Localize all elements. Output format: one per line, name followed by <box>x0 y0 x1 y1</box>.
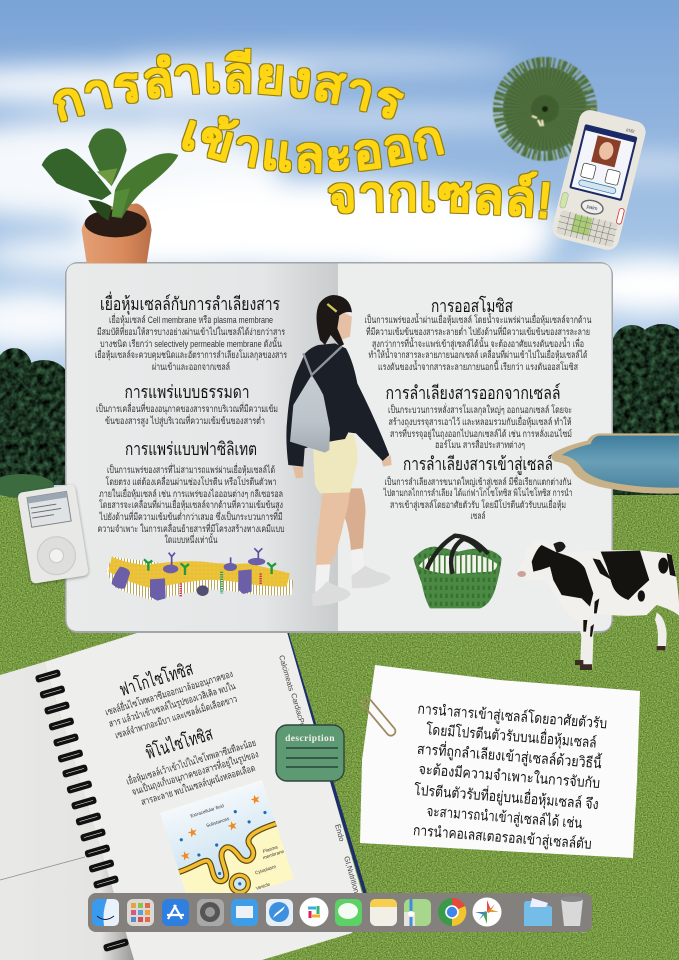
caller photo <box>591 135 621 167</box>
section: facilitated diffusion <box>98 439 284 546</box>
title: จากเซลล์! <box>327 170 550 220</box>
icon: settings <box>197 899 224 926</box>
body text: สร้างถุงบรรจุสารเอาไว้ และหลอมรวมกับเยื่อหุ้มเซลล์ ทำให้ <box>388 415 572 428</box>
body text: เป็นการลำเลียงสารขนาดใหญ่เข้าสู่เซลล์ มีชื่อเรียกแตกต่างกัน <box>384 475 572 488</box>
text: phagocytosis description: สาร แล้วนำเข้าเซลล์ในรูปของเวสิเคิล พบใน <box>107 680 237 730</box>
icon: launchpad <box>127 899 154 926</box>
title <box>52 48 550 220</box>
heading: การแพร่แบบฟาซิลิเทต <box>125 439 257 459</box>
description tag: description <box>285 734 335 744</box>
body text: เป็นการแพร่ของน้ำผ่านเยื่อหุ้มเซลล์ โดยน้ำจะแพร่ผ่านเยื่อหุ้มเซลล์จากด้าน <box>364 313 592 326</box>
brand label: palm <box>586 204 598 212</box>
icon: folder <box>524 898 552 926</box>
icon: messages <box>335 899 362 926</box>
icon: shopping basket <box>413 536 502 608</box>
book: left page <box>66 264 338 631</box>
front leg <box>316 488 350 567</box>
body text: บางชนิด เรียกว่า selectively permeable membrane ดังนั้น <box>100 337 282 350</box>
body text: ภายในเยื่อหุ้มเซลล์ เช่น การแพร่ของไอออนต่างๆ กลีเซอรอล <box>99 487 283 500</box>
carrier label: at&t <box>625 127 636 135</box>
icon: round palm plant <box>496 60 594 158</box>
book: right page <box>338 264 612 631</box>
heading: เยื่อหุ้มเซลล์กับการลำเลียงสาร <box>100 291 280 315</box>
note text: โปรตีนตัวรับที่อยู่บนเยื่อหุ้มเซลล์ จึง <box>413 780 599 813</box>
legs <box>577 610 667 668</box>
main open book panel <box>65 262 613 633</box>
paper note <box>360 665 640 858</box>
title line 2 <box>178 146 452 172</box>
body text: ข้นของสารสูง ไปสู่บริเวณที่ความเข้มข้นของสารต่ำ <box>105 414 265 427</box>
backpack <box>290 375 330 453</box>
note text: จะต้องมีความจำเพาะในการจับกับ <box>418 760 601 792</box>
heading: การลำเลียงสารออกจากเซลล์ <box>386 383 560 403</box>
body text: เป็นการแพร่ของสารที่ไม่สามารถแพร่ผ่านเยื่อหุ้มเซลล์ได้ <box>107 463 275 476</box>
skirt <box>313 433 357 493</box>
photo: walking girl with backpack <box>286 295 392 606</box>
diagram: endocytosis <box>160 780 294 912</box>
text: phagocytosis description: เซลล์ยื่นไซโทพลาซึมออกมาล้อมอนุภาคของ <box>103 667 234 718</box>
shoes <box>312 566 391 606</box>
body text: ที่มีความเข้มข้นของสารละลายต่ำ ไปยังด้านที่มีความเข้มข้นของสารละลาย <box>366 325 590 338</box>
section: simple diffusion <box>96 382 278 427</box>
icon: slack <box>300 898 328 926</box>
diagram: endocytosis: Vesicle <box>255 882 271 891</box>
background: distant trees left <box>0 348 72 485</box>
body text: เซลล์ <box>470 510 486 522</box>
notebook: side tabs: GI,Nutrition <box>342 855 361 894</box>
icon: app store <box>162 899 189 926</box>
icon: plant in terracotta pot <box>42 128 178 263</box>
body text: เยื่อหุ้มเซลล์จะควบคุมชนิดและอัตราการลำเลียงโมเลกุลของสาร <box>95 348 287 361</box>
icon: cow <box>517 540 679 670</box>
title: การลำเลียงสาร <box>52 48 405 122</box>
diagram: endocytosis: Extracellular fluid <box>190 803 225 819</box>
icon: finder <box>92 899 119 926</box>
note text: โดยมีโปรตีนตัวรับบนเยื่อหุ้มเซลล์ <box>425 719 597 752</box>
diagram: endocytosis: ★ <box>249 794 262 807</box>
body text: มีสมบัติที่ยอมให้สารบางอย่างผ่านเข้าไปในเซลล์ได้ง่ายกว่าสาร <box>97 325 285 338</box>
body text: เป็นกระบวนการหลั่งสารโมเลกุลใหญ่ๆ ออกนอกเซลล์ โดยจะ <box>388 403 572 416</box>
diagram: cell membrane <box>107 548 293 601</box>
icon: smartphone <box>550 108 648 252</box>
notebook: side tabs <box>277 654 361 894</box>
heading: pinocytosis: พิโนไซโทซิส <box>143 723 215 763</box>
note text: การนำคอเลสเตอรอลเข้าสู่เซลล์ตับ <box>412 822 592 853</box>
diagram: endocytosis: Plasma <box>262 844 279 854</box>
body text: สารเข้าสู่เซลล์โดยอาศัยตัวรับ โดยมีโปรตีนตัวรับบนเยื่อหุ้ม <box>390 498 566 511</box>
notebook: blue edge <box>277 600 365 893</box>
background: grass field <box>0 474 679 960</box>
icon: mp3 player <box>17 484 89 584</box>
text: phagocytosis description <box>103 667 239 741</box>
section: exocytosis <box>386 383 572 451</box>
body text: ทำให้น้ำจากสารละลายภายนอกเซลล์ เคลื่อนที่ผ่านเข้าไปในเยื่อหุ้มเซลล์ได้ <box>368 348 588 361</box>
diagram: endocytosis: ★ <box>226 820 239 833</box>
notebook: left page <box>0 662 134 960</box>
heading: phagocytosis: ฟาโกไซโทซิส <box>117 658 196 700</box>
diagram: endocytosis: membrane <box>262 849 285 860</box>
keypad <box>556 210 618 247</box>
note text <box>412 700 608 853</box>
body text: ฮอร์โมน สารสื่อประสาทต่างๆ <box>435 438 525 451</box>
background: distant trees right <box>608 324 679 510</box>
leaves <box>88 200 112 221</box>
body text: ความจำเพาะ ในการเคลื่อนย้ายสารที่มีโครงสร้างทางเคมีแบบ <box>98 522 284 535</box>
heading: การลำเลียงสารเข้าสู่เซลล์ <box>403 454 553 475</box>
socks <box>315 548 365 592</box>
heading: การออสโมซิส <box>431 295 513 316</box>
body text <box>388 403 572 451</box>
text: pinocytosis description: จนเป็นถุงเก็บอนุภาคของสารที่อยู่ในรูปของ <box>130 747 260 798</box>
body text: สารที่บรรจุอยู่ในถุงออกไปนอกเซลล์ได้ เช่น การหลั่งเอนไซม์ <box>390 427 572 440</box>
nav buttons <box>559 192 569 209</box>
body text: โดยตรง แต่ต้องเคลื่อนผ่านช่องโปรตีน หรือโปรตีนตัวพา <box>106 475 276 488</box>
diagram: endocytosis: ★ <box>186 827 199 840</box>
section: osmosis <box>364 295 592 373</box>
diagram: endocytosis: Cytoplasm <box>254 864 277 875</box>
diagram: endocytosis: ★ <box>179 850 192 863</box>
icon: pool <box>551 433 679 494</box>
body text <box>95 313 287 373</box>
sweater <box>286 343 389 467</box>
notebook: side tabs: CardiacPulm <box>289 692 310 736</box>
description tag <box>276 725 344 781</box>
body text: แรงดันของน้ำจากสารละลายภายนอกนี้ เรียกว่า แรงดันออสโมซิส <box>378 360 578 373</box>
body text <box>96 402 278 427</box>
pot <box>82 203 152 263</box>
text: pinocytosis description <box>125 736 260 808</box>
icon: safari <box>266 899 293 926</box>
body text: โดยสารจะเคลื่อนที่ผ่านเยื่อหุ้มเซลล์จากด้านที่ความเข้มข้นสูง <box>99 498 283 511</box>
dock bar <box>88 893 592 932</box>
icon: trash <box>561 896 583 926</box>
section: endocytosis <box>383 454 572 522</box>
body text: ไปยังด้านที่มีความเข้มข้นต่ำกว่าเสมอ ซึ่งเป็นกระบวนการที่มี <box>99 510 282 523</box>
note text: การนำสารเข้าสู่เซลล์โดยอาศัยตัวรับ <box>417 700 608 732</box>
hair and head <box>336 312 352 341</box>
body text <box>98 463 284 546</box>
text: phagocytosis description: เซลล์จำพวกอะมีบา และเซลล์เม็ดเลือดขาว <box>113 692 239 741</box>
icon: photos <box>472 898 502 926</box>
notebook: side tabs: Calcimeats <box>277 654 296 692</box>
icon: paper clip <box>361 696 397 738</box>
title line 3 <box>328 211 548 218</box>
body text: เป็นการเคลื่อนที่ของอนุภาคของสารจากบริเวณที่มีความเข้ม <box>96 402 278 415</box>
black patches <box>532 545 676 637</box>
hands <box>293 455 392 478</box>
body text: เยื่อหุ้มเซลล์ Cell membrane หรือ plasma membrane <box>109 313 273 326</box>
notebook: spiral rings <box>37 671 127 950</box>
left notebook <box>0 590 365 960</box>
notebook: right page <box>44 590 362 960</box>
icon: maps <box>404 899 431 926</box>
icon: chrome <box>438 898 466 926</box>
body text: สูงกว่าการที่น้ำจะแพร่เข้าสู่เซลล์ได้นั้น จะต้องอาศัยแรงดันของน้ำ เพื่อ <box>372 337 584 350</box>
body text <box>364 313 592 373</box>
body <box>517 540 679 623</box>
title line 1 <box>58 92 402 122</box>
body text: ผ่านเข้าและออกจากเซลล์ <box>152 361 230 373</box>
diagram: endocytosis: Substances <box>205 816 231 828</box>
note text: จะสามารถนำเข้าสู่เซลล์ได้ เช่น <box>426 802 583 832</box>
text: pinocytosis description: สารละลาย พบในเซลล์บุผนังหลอดเลือด <box>139 762 257 808</box>
body text: ไปตามกลไกการลำเลียง ได้แก่ฟาโกไซโทซิส พิโนไซโทซิส การนำ <box>383 487 572 499</box>
text: pinocytosis description: เยื่อหุ้มเซลล์เว้าเข้าไปในไซโทพลาซึมทีละน้อย <box>125 736 257 788</box>
body text <box>383 475 572 522</box>
ear <box>553 542 566 553</box>
title: เข้าและออก <box>181 115 445 174</box>
heading: การแพร่แบบธรรมดา <box>124 382 250 402</box>
icon: mail <box>231 899 258 926</box>
back leg <box>344 488 366 552</box>
body text: ใดแบบหนึ่งเท่านั้น <box>164 533 218 546</box>
note text: สารที่ถูกลำเลียงเข้าสู่เซลล์ด้วยวิธีนี้ <box>416 738 603 772</box>
section: membrane transport <box>95 291 287 373</box>
background: sky with clouds <box>0 0 679 520</box>
icon: notes <box>370 899 397 926</box>
notebook: side tabs: Endo <box>333 823 347 842</box>
